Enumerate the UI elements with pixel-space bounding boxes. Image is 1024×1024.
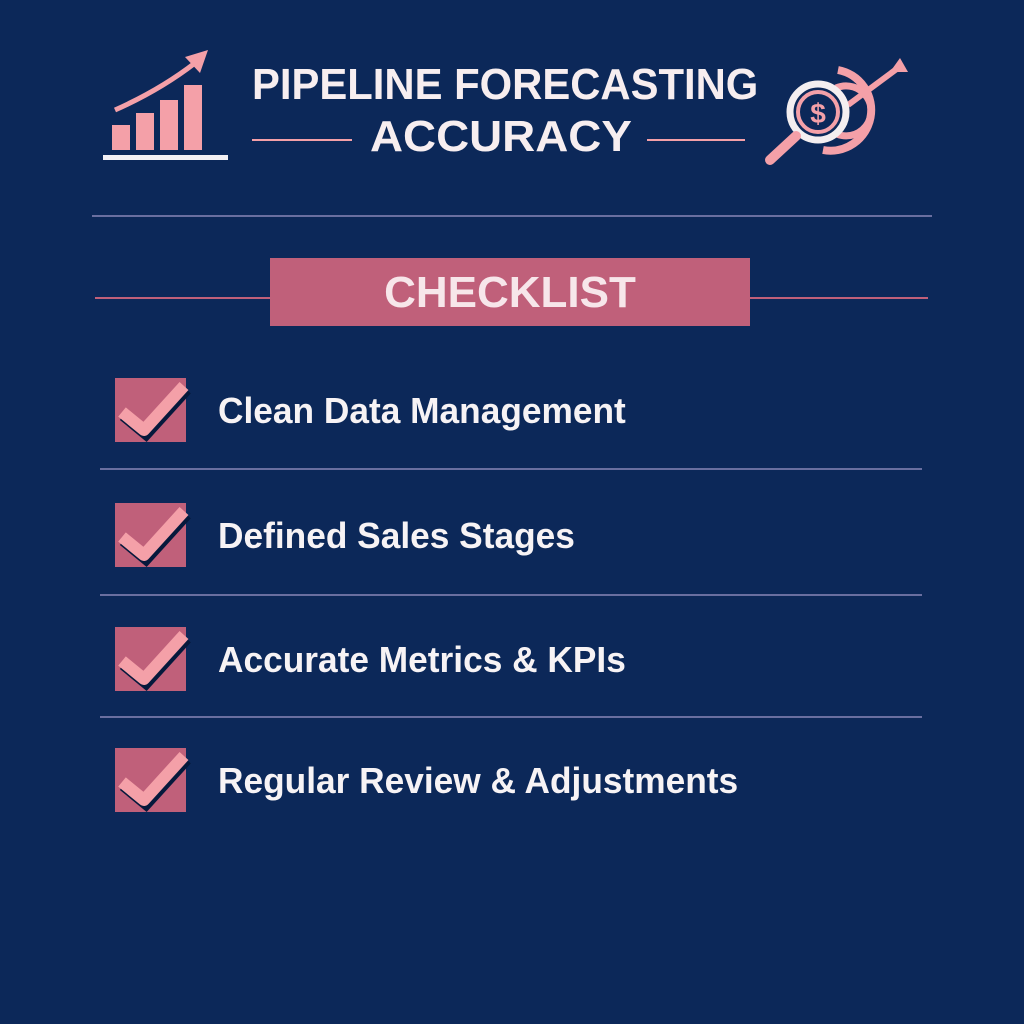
icon: magnifier target (765, 58, 908, 165)
item 1: Clean Data Management (218, 390, 626, 431)
checklist banner: CHECKLIST (384, 268, 636, 317)
title (252, 60, 758, 161)
title: ACCURACY (370, 112, 632, 161)
icon: bar chart (103, 50, 228, 160)
icon: magnifier target: $ (810, 98, 826, 129)
item 2: Defined Sales Stages (218, 515, 575, 556)
item 2 (115, 503, 575, 567)
item 4 (115, 748, 738, 812)
item 1 (115, 378, 626, 442)
item 3: Accurate Metrics & KPIs (218, 639, 626, 680)
item 4: Regular Review & Adjustments (218, 760, 738, 801)
item 3 (115, 627, 626, 691)
title: PIPELINE FORECASTING (252, 60, 758, 109)
